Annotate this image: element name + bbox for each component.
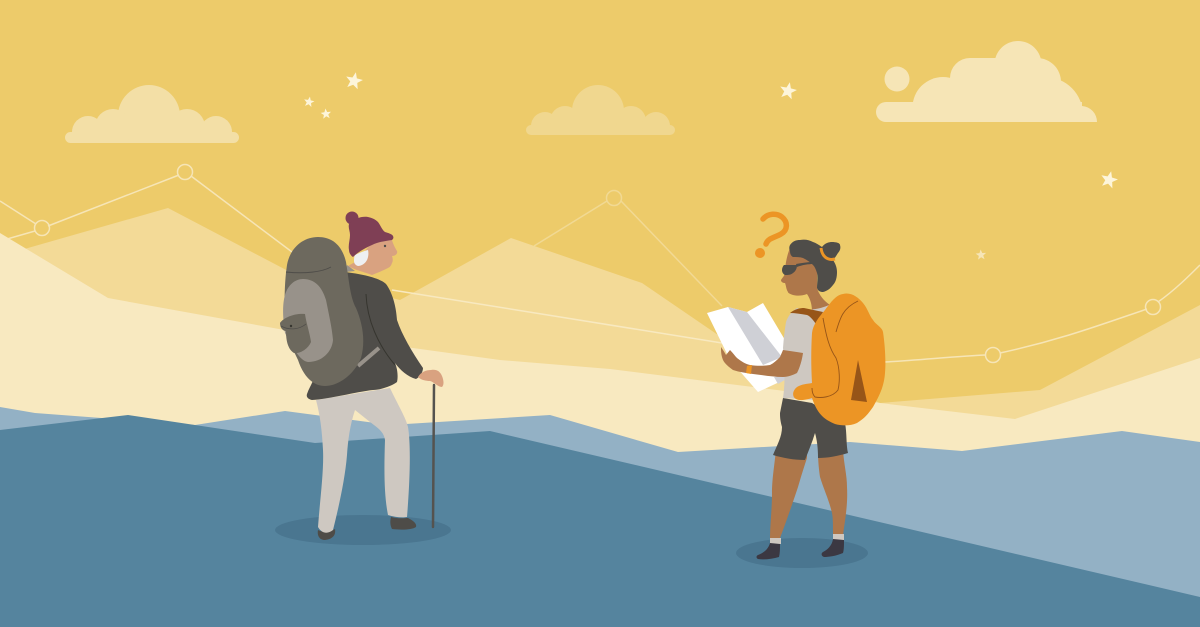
backpack side panel — [283, 279, 333, 362]
sunglasses — [782, 262, 814, 275]
clouds — [65, 41, 1097, 153]
backpack strap — [790, 308, 823, 324]
shoes — [756, 539, 844, 559]
shirt — [783, 305, 829, 400]
hiker with map — [707, 214, 885, 568]
ground shadow — [736, 538, 868, 568]
jacket seam — [366, 294, 395, 365]
hair tie — [821, 248, 835, 259]
hiker with cane — [275, 212, 451, 545]
dark blue foreground — [0, 415, 1200, 627]
trail line over mountains — [392, 290, 722, 343]
beanie hat — [346, 212, 393, 257]
eye — [384, 245, 386, 247]
socks — [770, 534, 844, 544]
pack seams — [812, 301, 858, 397]
small pocket — [280, 314, 311, 353]
backpack seam — [286, 267, 331, 273]
cloud middle — [526, 85, 675, 140]
light blue ridge — [0, 407, 1200, 627]
ground shadow — [275, 515, 451, 545]
legs — [770, 450, 847, 538]
arm and hand — [721, 347, 803, 377]
backpack body — [285, 237, 363, 386]
cloud left — [65, 85, 239, 148]
wristband — [746, 365, 752, 374]
pack pocket triangle — [851, 360, 867, 402]
walking pole — [433, 385, 434, 527]
pale foothills — [0, 233, 1200, 480]
neck and face — [781, 248, 830, 312]
moon — [884, 66, 910, 92]
hand — [418, 370, 444, 387]
orange backpack — [793, 294, 885, 425]
trousers — [316, 388, 410, 533]
hair — [354, 250, 368, 266]
far mountains — [0, 208, 1200, 480]
question mark — [755, 214, 786, 258]
shorts — [773, 398, 848, 460]
pocket flap line — [281, 324, 306, 329]
jacket — [307, 272, 423, 400]
map — [707, 303, 788, 392]
head — [348, 237, 397, 275]
stars — [303, 70, 1119, 260]
trail lines with waypoints — [0, 164, 1200, 362]
hair — [789, 240, 840, 292]
cloud right — [876, 41, 1097, 122]
collar — [345, 265, 355, 272]
pocket button — [290, 325, 292, 327]
shoes — [318, 517, 416, 540]
hip strap — [358, 348, 379, 366]
